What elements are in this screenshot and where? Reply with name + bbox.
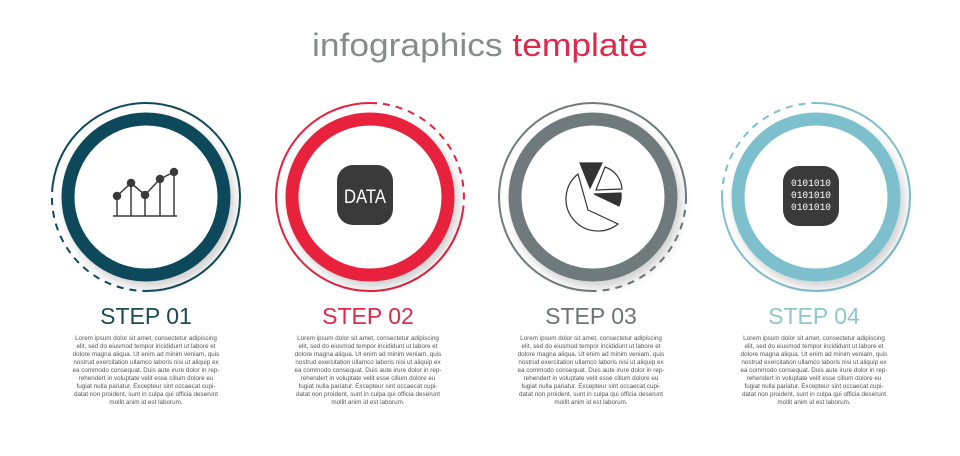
thick ring 2 <box>292 119 448 275</box>
body text 2: rehendert in voluptate velit esse cillum dolore eu <box>301 375 436 382</box>
body text 4 <box>740 335 888 406</box>
icon: binary: 0101010 <box>791 191 831 202</box>
body text 2: datat non proident, sunt in culpa qui officia deserunt <box>296 391 440 398</box>
body text 2: fugiat nulla pariatur. Excepteur sint occaecat cupi- <box>299 383 437 390</box>
body text 1: mollit anim id est laborum. <box>109 399 183 406</box>
body text 2: nostrud exercitation ullamco laboris nisi ut aliquip ex <box>295 359 441 366</box>
body text 3: elit, sed do eiusmod tempor incididunt ut labore et <box>522 343 661 350</box>
body text 3: fugiat nulla pariatur. Excepteur sint occaecat cupi- <box>522 383 660 390</box>
body text 2: elit, sed do eiusmod tempor incididunt ut labore et <box>299 343 438 350</box>
body text 3: nostrud exercitation ullamco laboris nisi ut aliquip ex <box>518 359 664 366</box>
body text 4: elit, sed do eiusmod tempor incididunt ut labore et <box>745 343 884 350</box>
body text 4: fugiat nulla pariatur. Excepteur sint occaecat cupi- <box>745 383 883 390</box>
icon: data <box>337 165 393 225</box>
outer ring 2 <box>276 103 464 291</box>
icon: pie chart <box>566 163 622 231</box>
body text 3: mollit anim id est laborum. <box>554 399 628 406</box>
body text 3: rehendert in voluptate velit esse cillum dolore eu <box>524 375 659 382</box>
body text 3: Lorem ipsum dolor sit amet, consectetur adipiscing <box>520 335 662 342</box>
outer ring 4 <box>722 103 910 291</box>
outer ring 1 <box>52 103 240 291</box>
body text 1: dolore magna aliqua. Ut enim ad minim veniam, quis <box>73 351 219 358</box>
icon: binary <box>783 166 839 226</box>
panel: step 01 <box>52 103 240 406</box>
heading: step 01: STEP 01 <box>100 303 192 329</box>
body text 2: mollit anim id est laborum. <box>331 399 405 406</box>
body text 2: ea commodo consequat. Duis aute irure dolor in rep- <box>294 367 442 374</box>
body text 4: datat non proident, sunt in culpa qui officia deserunt <box>742 391 886 398</box>
heading: step 03: STEP 03 <box>545 303 637 329</box>
body text 3: datat non proident, sunt in culpa qui officia deserunt <box>519 391 663 398</box>
body text 1: ea commodo consequat. Duis aute irure dolor in rep- <box>72 367 220 374</box>
body text 3 <box>517 335 665 406</box>
body text 1 <box>72 335 220 406</box>
body text 4: mollit anim id est laborum. <box>777 399 851 406</box>
body text 2: Lorem ipsum dolor sit amet, consectetur adipiscing <box>297 335 439 342</box>
body text 1: rehendert in voluptate velit esse cillum dolore eu <box>79 375 214 382</box>
body text 4: nostrud exercitation ullamco laboris nisi ut aliquip ex <box>741 359 887 366</box>
heading: step 04: STEP 04 <box>768 303 860 329</box>
icon: data: DATA <box>344 187 386 208</box>
body text 3: ea commodo consequat. Duis aute irure dolor in rep- <box>517 367 665 374</box>
heading: step 02: STEP 02 <box>322 303 414 329</box>
title: infographics template <box>312 27 648 63</box>
icon: binary: 0101010 <box>791 203 831 214</box>
body text 1: Lorem ipsum dolor sit amet, consectetur adipiscing <box>75 335 217 342</box>
body text 1: nostrud exercitation ullamco laboris nisi ut aliquip ex <box>73 359 219 366</box>
body text 4: ea commodo consequat. Duis aute irure dolor in rep- <box>740 367 888 374</box>
icon: line chart <box>113 168 178 216</box>
panel: step 03 <box>499 103 686 406</box>
body text 1: fugiat nulla pariatur. Excepteur sint occaecat cupi- <box>77 383 215 390</box>
panel: step 02 <box>276 103 464 406</box>
panel: step 04 <box>722 103 910 406</box>
body text 3: dolore magna aliqua. Ut enim ad minim veniam, quis <box>518 351 664 358</box>
thick ring 3 <box>515 119 671 275</box>
body text 4: dolore magna aliqua. Ut enim ad minim veniam, quis <box>741 351 887 358</box>
thick ring 1 <box>68 119 224 275</box>
body text 1: datat non proident, sunt in culpa qui officia deserunt <box>74 391 218 398</box>
outer ring 3 <box>499 103 686 291</box>
body text 2: dolore magna aliqua. Ut enim ad minim veniam, quis <box>295 351 441 358</box>
body text 2 <box>294 335 442 406</box>
thick ring 4 <box>738 119 894 275</box>
icon: binary: 0101010 <box>791 179 831 190</box>
body text 4: rehendert in voluptate velit esse cillum dolore eu <box>747 375 882 382</box>
body text 4: Lorem ipsum dolor sit amet, consectetur adipiscing <box>743 335 885 342</box>
body text 1: elit, sed do eiusmod tempor incididunt ut labore et <box>77 343 216 350</box>
